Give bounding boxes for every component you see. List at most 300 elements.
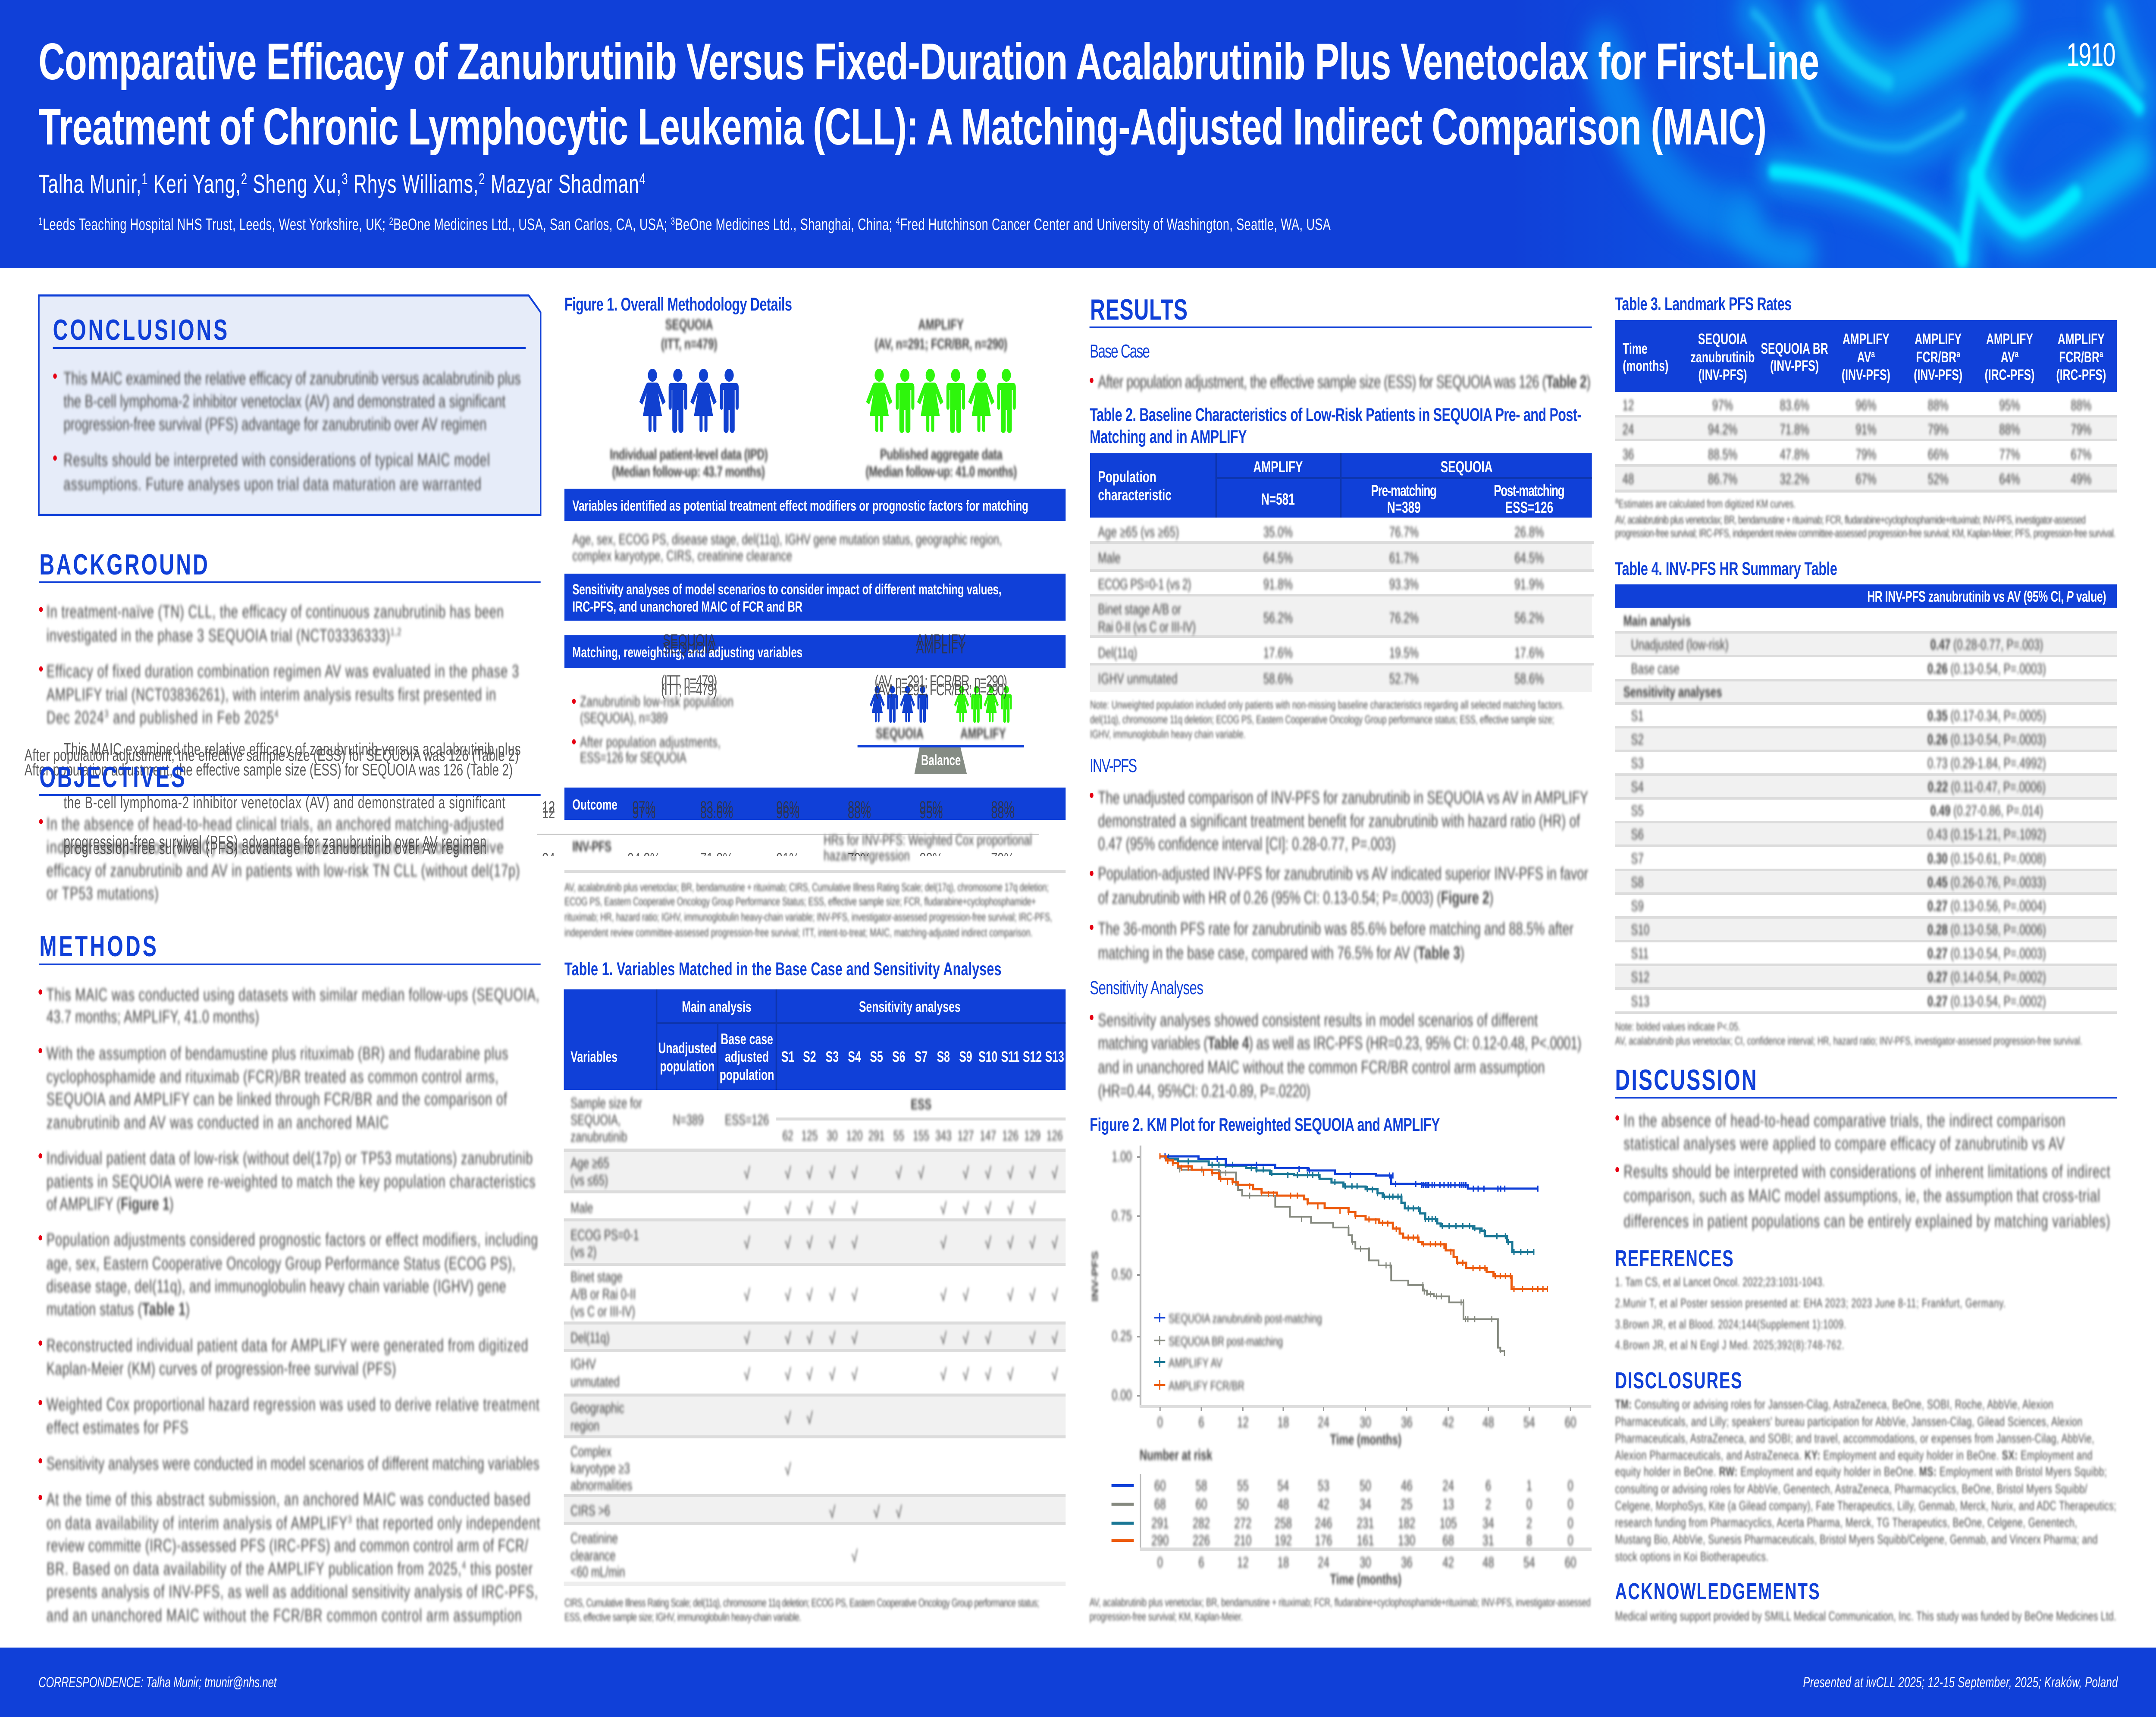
- disclosures text: stock options in Koi Biotherapeutics.: [1615, 1549, 1768, 1564]
- table 1 header: S6: [892, 1049, 906, 1065]
- overlapping stray study labels and table row: 79%: [991, 849, 1014, 868]
- table 2 body: Binet stage A/B or: [1098, 601, 1181, 618]
- overlapping stray study labels and table row: 88%: [991, 803, 1014, 822]
- overlapping stray study labels and table row: (AV, n=291; FCR/BR, n=290): [874, 680, 1007, 699]
- number at risk table: 0: [1526, 1496, 1532, 1513]
- table 3 header: AV: [1857, 349, 1871, 366]
- table 4 row labels: S8: [1631, 874, 1644, 891]
- table 3 header: SEQUOIA: [1698, 331, 1747, 348]
- x axis labels: 30: [1360, 1414, 1371, 1431]
- number at risk table: 0: [1567, 1478, 1573, 1494]
- matching bullets: After population adjustments,: [580, 734, 721, 750]
- overlapping stray text lines: After population adjustment, the effective sample size (ESS) for SEQUOIA was 126 (Table 2): [25, 760, 513, 779]
- chart legend: SEQUOIA zanubrutinib post-matching: [1169, 1311, 1322, 1326]
- table 1 header: S11: [1001, 1049, 1020, 1065]
- overlapping stray study labels and table row: 24: [542, 849, 555, 868]
- number at risk table: 42: [1442, 1554, 1454, 1571]
- authors: 2: [479, 170, 485, 188]
- matching variables text: Age, sex, ECOG PS, disease stage, del(11q), IGHV gene mutation status, geographic region,: [572, 531, 1002, 548]
- number at risk table: 54: [1523, 1554, 1535, 1571]
- number at risk table: 42: [1318, 1496, 1329, 1513]
- table 2 body: 91.9%: [1514, 576, 1544, 593]
- table 1 sample sizes: 147: [980, 1128, 996, 1143]
- x axis labels: 12: [1237, 1414, 1249, 1431]
- chart legend: SEQUOIA BR post-matching: [1169, 1334, 1283, 1349]
- overlapping stray study labels and table row: AMPLIFY: [916, 631, 966, 649]
- number at risk table: 231: [1357, 1515, 1374, 1532]
- reference list: 3.Brown JR, et al Blood. 2024;144(Supplement 1):1009.: [1615, 1318, 1846, 1331]
- objectives text: In the absence of head-to-head clinical trials, an anchored matching-adjusted: [47, 814, 504, 834]
- sensitivity text: (HR=0.44, 95%CI: 0.21-0.89, P=.0220): [1098, 1081, 1310, 1101]
- banner: sensitivity analyses: Sensitivity analyses of model scenarios to consider impact of different matching values,: [572, 581, 1001, 598]
- reference list: [1615, 1275, 2006, 1352]
- table 1 row labels: region: [570, 1418, 599, 1434]
- methods text: patients in SEQUOIA were re-weighted to match the key population characteristics: [47, 1171, 536, 1191]
- methods text: Population adjustments considered prognostic factors or effect modifiers, including: [47, 1230, 538, 1249]
- matching variables text: [572, 531, 1002, 564]
- number at risk table: 0: [1157, 1554, 1163, 1571]
- table 4 row labels: S1: [1631, 708, 1644, 724]
- table 2 footnote: IGHV, immunoglobulin heavy chain variable.: [1090, 728, 1246, 741]
- heading: methods: METHODS: [39, 930, 157, 963]
- table 2 body: 26.8%: [1514, 524, 1544, 540]
- x axis labels: 48: [1482, 1414, 1494, 1431]
- chart legend: [1154, 1311, 1322, 1393]
- table 4 row labels: Sensitivity analyses: [1623, 684, 1722, 700]
- number at risk table: 50: [1237, 1496, 1249, 1513]
- table 1 check marks: √: [851, 1547, 858, 1565]
- table 1 header: Base case: [721, 1031, 773, 1048]
- table 3 body: 79%: [2071, 421, 2091, 438]
- number at risk table: 25: [1401, 1496, 1413, 1513]
- figure 1 footnote: [564, 881, 1052, 939]
- table 3 footnote: progression-free survival; IRC-PFS, independent review committee-assessed progression-free survival; KM, Kaplan-Meier; PFS, progression-free survival.: [1615, 527, 2115, 540]
- table 3 body: 49%: [2071, 471, 2091, 487]
- disclosures text: [1615, 1397, 2116, 1564]
- methods text: SEQUOIA and AMPLIFY can be linked through FCR/BR and the comparison of: [47, 1089, 507, 1109]
- figure 2 footnote: [1090, 1596, 1591, 1623]
- figure 2 footnote: progression-free survival; KM, Kaplan-Meier.: [1090, 1610, 1243, 1623]
- panel: methods: [38, 930, 541, 1625]
- heading: results: RESULTS: [1090, 294, 1188, 326]
- panel: figure 1 methodology: [537, 294, 1065, 939]
- number at risk table: 18: [1278, 1554, 1289, 1571]
- x axis labels: [1157, 1414, 1576, 1448]
- acknowledgements text: Medical writing support provided by SMILL Medical Communication, Inc. This study was funded by BeOne Medicines Ltd.: [1615, 1608, 2116, 1623]
- table 1 sample sizes: 30: [827, 1128, 837, 1143]
- disclosures text: Pharmaceuticals, and Lilly; speakers' bureau participation for AbbVie, Janssen-Cilag, Gilead Sciences, Alexion: [1615, 1414, 2082, 1429]
- background text: In treatment-naïve (TN) CLL, the efficacy of continuous zanubrutinib has been: [47, 602, 504, 622]
- methods text: Individual patient data of low-risk (without del(17p) or TP53 mutations) zanubrutinib: [47, 1148, 533, 1168]
- table 3 body: 96%: [1855, 397, 1877, 414]
- table 4 row labels: S2: [1631, 731, 1644, 748]
- heading: discussion: DISCUSSION: [1615, 1064, 1757, 1096]
- icon: balance scale: AMPLIFY: [960, 725, 1006, 742]
- overlapping stray text lines: the B-cell lymphoma-2 inhibitor venetoclax (AV) and demonstrated a significant: [63, 793, 506, 812]
- x axis labels: 18: [1278, 1414, 1289, 1431]
- heading: objectives: OBJECTIVES: [39, 761, 185, 794]
- methods text: Weighted Cox proportional hazard regression was used to derive relative treatment: [47, 1394, 539, 1414]
- methods text: presents analysis of INV-PFS, as well as additional sensitivity analysis of IRC-PFS,: [47, 1582, 538, 1601]
- table 4 row labels: S10: [1631, 922, 1649, 938]
- number at risk table: 58: [1196, 1478, 1207, 1494]
- study column labels: (AV, n=291; FCR/BR, n=290): [874, 336, 1007, 352]
- number at risk table: Number at risk: [1140, 1447, 1213, 1463]
- overlapping stray study labels and table row: 88%: [848, 797, 871, 816]
- table 1 check marks: √√√√√√√√√√: [744, 1286, 1058, 1304]
- table 4 header: HR INV-PFS zanubrutinib vs AV (95% CI, P value): [1867, 589, 2106, 605]
- table 1 row labels: [570, 1095, 642, 1580]
- table 1 row labels: A/B or Rai 0-II: [570, 1286, 636, 1303]
- banner: sensitivity analyses: [564, 574, 1065, 621]
- table 2 body: Male: [1098, 550, 1121, 566]
- conclusions text: assumptions. Future analyses upon trial data maturation are warranted: [63, 474, 481, 494]
- number at risk table: 8: [1526, 1532, 1532, 1549]
- curve: SEQUOIA BR: [1160, 1156, 1504, 1356]
- table 4 hazard ratios: 0.30 (0.15-0.61, P=.0008): [1927, 851, 2046, 867]
- overlapping stray text lines: [25, 740, 521, 858]
- y axis labels: 0.00: [1112, 1387, 1132, 1403]
- table 1 sample sizes: [673, 1096, 1063, 1143]
- table 4 title: Table 4. INV-PFS HR Summary Table: [1615, 558, 1837, 579]
- table 2 title: [1090, 404, 1582, 447]
- table 1 row labels: Geographic: [570, 1400, 624, 1416]
- disclosures text: consulting or advising roles for AbbVie, Genentech, AstraZeneca, Pharmacyclics, BeOne, Bristol Myers Squibb/: [1615, 1481, 2087, 1496]
- table 1 sample sizes: 291: [868, 1128, 885, 1143]
- INV-PFS text: The unadjusted comparison of INV-PFS for zanubrutinib in SEQUOIA vs AV in AMPLIFY: [1098, 788, 1588, 807]
- background text: 3: [104, 708, 109, 720]
- methods text: age, sex, Eastern Cooperative Oncology Group Performance Status (ECOG PS),: [47, 1253, 516, 1273]
- table 2 body: Age ≥65 (vs ≥65): [1098, 524, 1179, 540]
- discussion text: statistical analyses were applied to compare efficacy of zanubrutinib vs AV: [1623, 1133, 2065, 1153]
- decorative swirl background: [1604, 13, 2139, 259]
- study column labels: AMPLIFY: [918, 317, 964, 333]
- panel: conclusions: [39, 295, 541, 515]
- table 3 header: SEQUOIA BR: [1761, 341, 1828, 357]
- table 2 header: Population: [1098, 468, 1156, 486]
- table 3 body: 67%: [1855, 471, 1877, 487]
- disclosures text: TM: Consulting or advising roles for Janssen-Cilag, AstraZeneca, BeOne, SOBI, Roche, AbbVie, Alexion: [1615, 1397, 2053, 1412]
- table 3 body: 83.6%: [1780, 397, 1809, 414]
- table 3 header: FCR/BR: [1916, 349, 1956, 366]
- authors: Rhys Williams,: [348, 170, 478, 199]
- title: Treatment of Chronic Lymphocytic Leukemia (CLL): A Matching-Adjusted Indirect Comparison (MAIC): [38, 98, 1767, 156]
- table 2 header: [1090, 453, 1592, 518]
- methods text: mutation status (Table 1): [47, 1299, 190, 1319]
- table 1 header: adjusted: [725, 1049, 769, 1065]
- affiliations: BeOne Medicines Ltd., Shanghai, China;: [675, 215, 896, 233]
- figure 2 footnote: AV, acalabrutinib plus venetoclax; BR, bendamustine + rituximab; FCR, fludarabine+cyclophosphamide+rituximab; INV-PFS, investigator-assessed: [1090, 1596, 1591, 1609]
- table 1 header: S4: [848, 1049, 861, 1065]
- table 3 footnote: a: [1615, 496, 1619, 505]
- table 1 check marks: √√√√√√√√√√: [744, 1234, 1058, 1252]
- overlapping stray text lines: progression-free survival (PFS) advantage for zanubrutinib over AV regimen: [63, 839, 486, 858]
- table 2 body: 58.6%: [1514, 671, 1544, 687]
- number at risk table: 31: [1482, 1532, 1494, 1549]
- data source captions: (Median follow-up: 43.7 months): [612, 464, 765, 480]
- disclosures text: equity holder in BeOne. RW: Employment and equity holder in BeOne. MS: Employment with Bristol Myers Squibb;: [1615, 1464, 2107, 1479]
- number at risk table: 282: [1193, 1515, 1210, 1532]
- y axis labels: 0.50: [1112, 1266, 1132, 1283]
- number at risk table: 182: [1398, 1515, 1415, 1532]
- y axis labels: 0.25: [1112, 1328, 1132, 1344]
- table 3 header: AMPLIFY: [2058, 331, 2105, 348]
- outcome row: hazard regression: [824, 848, 910, 864]
- table 3 body: 77%: [1999, 446, 2020, 463]
- table 1 row labels: Sample size for: [570, 1095, 642, 1111]
- authors: 1: [141, 170, 148, 188]
- table 4 footnote: [1615, 1020, 2082, 1047]
- outcome row: INV-PFS: [572, 838, 611, 855]
- overlapping stray study labels and table row: 95%: [920, 803, 943, 822]
- overlapping stray study labels and table row: 12: [542, 803, 555, 822]
- conclusions text: Results should be interpreted with considerations of typical MAIC model: [63, 450, 490, 470]
- banner: variables identified: Variables identified as potential treatment effect modifiers or prognostic factors for matching: [572, 498, 1028, 514]
- x axis labels: 60: [1565, 1414, 1576, 1431]
- background text: [47, 602, 519, 727]
- data source captions: Individual patient-level data (IPD): [610, 446, 768, 463]
- table 1 row labels: (vs ≤65): [570, 1172, 608, 1189]
- table 2 body: 56.2%: [1514, 610, 1544, 626]
- subheading: INV-PFS: INV-PFS: [1090, 755, 1137, 776]
- overlapping stray study labels and table row: 96%: [776, 797, 799, 816]
- figure 1 footnote: ECOG PS, Eastern Cooperative Oncology Group Performance Status; ESS, effective sample size; FCR, fludarabine+cyclophosphamide+: [564, 895, 1036, 908]
- panel: discussion: [1615, 1064, 2117, 1231]
- panel: table 4: [1615, 558, 2117, 1047]
- table 3 body: 86.7%: [1708, 471, 1737, 487]
- table 2 footnote: del(11q), chromosome 11q deletion; ECOG PS, Eastern Cooperative Oncology Group performance status; ESS, effective sample size;: [1090, 713, 1554, 726]
- overlapping stray study labels and table row: SEQUOIA: [663, 638, 716, 657]
- table 2 header: Post-matching: [1494, 482, 1565, 499]
- disclosures text: Celgene, MorphoSys, Kite (a Gilead company), Fate Therapeutics, Lilly, Genmab, Merck, Nurix, and ADC Therapeutics;: [1615, 1498, 2116, 1513]
- methods text: [47, 985, 540, 1625]
- table 1 header: [564, 989, 1065, 1090]
- table 1 header: S3: [826, 1049, 839, 1065]
- sensitivity text: and in unanchored MAIC without the common FCR/BR control arm assumption: [1098, 1057, 1545, 1077]
- table 3 header: (IRC-PFS): [1985, 367, 2034, 383]
- table 4 footnote: Note: bolded values indicate P<.05.: [1615, 1020, 1740, 1033]
- table 1 row labels: Complex: [570, 1444, 611, 1460]
- banner: sensitivity analyses: IRC-PFS, and unanchored MAIC of FCR and BR: [572, 599, 802, 615]
- methods text: cyclophosphamide and rituximab (FCR)/BR treated as common control arms,: [47, 1067, 498, 1086]
- table 3 header: (IRC-PFS): [2056, 367, 2106, 383]
- objectives text: [47, 814, 520, 903]
- table 4 hazard ratios: 0.27 (0.13-0.54, P=.0002): [1927, 993, 2046, 1010]
- discussion text: differences in patient populations can be entirely explained by matching variables): [1623, 1211, 2110, 1231]
- number at risk table: 192: [1275, 1532, 1292, 1549]
- table 4 hazard ratios: 0.27 (0.13-0.54, P=.0003): [1927, 945, 2046, 962]
- overlapping stray study labels and table row: 71.8%: [700, 849, 733, 868]
- table 4 hazard ratios: 0.22 (0.11-0.47, P=.0006): [1928, 779, 2046, 795]
- table 2 body: 61.7%: [1389, 550, 1419, 566]
- table 1 header: Unadjusted: [658, 1040, 716, 1057]
- table 1 sample sizes: 129: [1024, 1128, 1040, 1143]
- table 2 body: 76.7%: [1389, 524, 1419, 540]
- number at risk table: 34: [1360, 1496, 1371, 1513]
- overlapping stray study labels and table row: 88%: [920, 849, 943, 868]
- curve: AMPLIFY FCR/BR: [1160, 1153, 1548, 1292]
- y axis title: INV-PFS: [1090, 1251, 1100, 1301]
- heading: acknowledgements: ACKNOWLEDGEMENTS: [1615, 1579, 1820, 1604]
- authors: Talha Munir,: [38, 170, 141, 199]
- overlapping stray study labels and table row: 91%: [776, 849, 799, 868]
- affiliations: BeOne Medicines Ltd., USA, San Carlos, CA, USA;: [393, 215, 671, 233]
- table 1 body: [564, 1095, 1065, 1586]
- table 2 header: AMPLIFY: [1253, 458, 1303, 476]
- methods text: 4: [462, 1560, 466, 1571]
- figure 2 title: Figure 2. KM Plot for Reweighted SEQUOIA and AMPLIFY: [1090, 1114, 1440, 1135]
- table 3 footnote: AV, acalabrutinib plus venetoclax; BR, bendamustine + rituximab; FCR, fludarabine+cyclophosphamide+rituximab; INV-PFS, investigator-assessed: [1615, 514, 2086, 526]
- table 1 header: population: [660, 1058, 714, 1075]
- study column labels: SEQUOIA: [665, 317, 713, 333]
- number at risk table: 272: [1234, 1515, 1251, 1532]
- number at risk table: 2: [1526, 1515, 1532, 1532]
- number at risk table: 48: [1278, 1496, 1289, 1513]
- icon: AMPLIFY patients: [866, 369, 1016, 433]
- panel: acknowledgements: [1615, 1579, 2116, 1623]
- objectives text: indirect comparison (MAIC) was conducted to investigate the comparative: [47, 837, 504, 857]
- table 1 sample sizes: N=389: [673, 1112, 704, 1128]
- objectives text: or TP53 mutations): [47, 883, 159, 903]
- table 3 body: 48: [1623, 471, 1634, 487]
- table 3 body: 36: [1623, 446, 1634, 463]
- background text: 4: [274, 708, 279, 720]
- overlapping stray study labels and table row: 96%: [776, 803, 799, 822]
- methods text: Reconstructed individual patient data for AMPLIFY were generated from digitized: [47, 1335, 528, 1355]
- table 1 sample sizes: 55: [893, 1128, 904, 1143]
- overlapping stray study labels and table row: (ITT, n=479): [661, 680, 717, 699]
- table 1 row labels: Male: [570, 1200, 593, 1216]
- affiliations: 2: [389, 216, 393, 227]
- table 1 title: Table 1. Variables Matched in the Base Case and Sensitivity Analyses: [564, 958, 1001, 979]
- number at risk table: 210: [1234, 1532, 1251, 1549]
- heading: conclusions: CONCLUSIONS: [53, 314, 227, 346]
- table 1 header: S9: [959, 1049, 972, 1065]
- table 3 body: 79%: [1855, 446, 1877, 463]
- methods text: this poster: [466, 1559, 533, 1579]
- table 4 hazard ratios: 0.73 (0.29-1.84, P=.4992): [1927, 755, 2046, 772]
- table 4 row labels: Unadjusted (low-risk): [1631, 637, 1729, 653]
- chart legend: AMPLIFY FCR/BR: [1169, 1378, 1244, 1393]
- table 3 body: [1615, 397, 2117, 493]
- table 1 row labels: karyotype ≥3: [570, 1460, 630, 1477]
- data source captions: Published aggregate data: [880, 446, 1003, 463]
- table 2 body: 64.5%: [1263, 550, 1293, 566]
- table 1 check marks: √√√√√√√√√√√√: [744, 1164, 1058, 1182]
- overlapping stray study labels and table row: 95%: [920, 797, 943, 816]
- table 1 row labels: IGHV: [570, 1356, 596, 1372]
- methods text: 43.7 months; AMPLIFY, 41.0 months): [47, 1007, 259, 1026]
- table 4 hazard ratios: 0.49 (0.27-0.86, P=.014): [1930, 803, 2043, 819]
- table 1 sample sizes: 126: [1002, 1128, 1018, 1143]
- icon: SEQUOIA patients: [639, 369, 739, 433]
- number at risk table: 0: [1567, 1515, 1573, 1532]
- INV-PFS text: matching in the base case, compared with 76.5% for AV (Table 3): [1098, 943, 1464, 963]
- background text: Dec 2024: [47, 707, 104, 727]
- panel: background: [39, 549, 541, 727]
- icon: balance scale: Balance: [921, 752, 961, 769]
- table 2 body: 56.2%: [1263, 610, 1293, 626]
- table 2 header: Pre-matching: [1371, 482, 1437, 499]
- header banner: [0, 0, 2156, 268]
- table 3 body: 64%: [1999, 471, 2020, 487]
- x axis labels: 36: [1401, 1414, 1413, 1431]
- x axis labels: 24: [1318, 1414, 1329, 1431]
- table 4 header: [1615, 584, 2117, 608]
- number at risk table: 161: [1357, 1532, 1374, 1549]
- number at risk table: 258: [1275, 1515, 1292, 1532]
- title: [38, 33, 1819, 156]
- title: Comparative Efficacy of Zanubrutinib Versus Fixed-Duration Acalabrutinib Plus Venetoclax for First-Line: [38, 33, 1819, 91]
- table 4 footnote: AV, acalabrutinib plus venetoclax; CI, confidence interval; HR, hazard ratio; INV-PFS, investigator-assessed progression-free survival.: [1615, 1035, 2082, 1047]
- table 1 header: S8: [937, 1049, 950, 1065]
- methods text: review committe (IRC)-assessed PFS (IRC-PFS) and common control arm of FCR/: [47, 1535, 528, 1555]
- table 3 body: 91%: [1855, 421, 1877, 438]
- overlapping stray study labels and table row: 88%: [848, 803, 871, 822]
- table 1 sample sizes: ESS=126: [725, 1112, 769, 1128]
- table 1 sample sizes: 126: [1047, 1128, 1063, 1143]
- table 1 check marks: √√√√√√√√√√: [744, 1199, 1036, 1218]
- overlapping stray study labels and table row: (AV, n=291; FCR/BR, n=290): [874, 672, 1007, 690]
- outcome row: HRs for INV-PFS: Weighted Cox proportional: [824, 832, 1032, 848]
- table 2 body: Rai 0-II (vs C or III-IV): [1098, 619, 1196, 635]
- overlapping stray text lines: After population adjustment, the effective sample size (ESS) for SEQUOIA was 126 (Table 2): [25, 746, 519, 765]
- table 2 header: N=581: [1261, 490, 1295, 508]
- methods text: of AMPLIFY (Figure 1): [47, 1194, 174, 1214]
- table 4 row labels: Base case: [1631, 661, 1680, 677]
- number at risk table: 55: [1237, 1478, 1249, 1494]
- reference list: 2.Munir T, et al Poster session presented at: EHA 2023; 2023 June 8-11; Frankfurt, Germany.: [1615, 1296, 2006, 1310]
- table 2 body: ECOG PS=0-1 (vs 2): [1098, 576, 1191, 593]
- table 3 body: 66%: [1928, 446, 1949, 463]
- table 3 body: 88%: [2071, 397, 2091, 414]
- discussion text: [1623, 1111, 2110, 1231]
- table 1 sample sizes: 127: [958, 1128, 974, 1143]
- table 3 header: a: [2100, 349, 2103, 360]
- conclusions text: the B-cell lymphoma-2 inhibitor venetoclax (AV) and demonstrated a significant: [63, 391, 505, 411]
- authors: 2: [241, 170, 247, 188]
- methods text: effect estimates for PFS: [47, 1417, 188, 1437]
- methods text: BR. Based on data availability of the AMPLIFY publication from 2025,: [47, 1559, 461, 1579]
- number at risk table: Time (months): [1330, 1571, 1401, 1588]
- table 2 header: N=389: [1387, 499, 1421, 516]
- authors: Mazyar Shadman: [485, 170, 639, 199]
- methods text: zanubrutinib and AV was conducted in an anchored MAIC: [47, 1112, 389, 1132]
- number at risk table: 0: [1567, 1496, 1573, 1513]
- number at risk table: 54: [1278, 1478, 1289, 1494]
- affiliations: Leeds Teaching Hospital NHS Trust, Leeds, West Yorkshire, UK;: [43, 215, 389, 233]
- table 3 body: 47.8%: [1780, 446, 1809, 463]
- methods text: that reported only independent: [352, 1513, 540, 1533]
- table 4 hazard ratios: 0.43 (0.15-1.21, P=.1092): [1927, 826, 2046, 843]
- affiliations: 3: [671, 216, 675, 227]
- matching bullets: (SEQUOIA), n=389: [580, 710, 668, 726]
- INV-PFS text: Population-adjusted INV-PFS for zanubrutinib vs AV indicated superior INV-PFS in favor: [1098, 863, 1588, 883]
- table 4 row labels: S11: [1631, 945, 1649, 962]
- chart legend: AMPLIFY AV: [1169, 1355, 1222, 1370]
- table 3 header: AMPLIFY: [1843, 331, 1890, 348]
- banner: matching: Matching, reweighting, and adjusting variables: [572, 644, 802, 661]
- table 1 check marks: √√√√√√√√√√: [744, 1329, 1058, 1347]
- table 1 row labels: clearance: [570, 1547, 616, 1564]
- background text: investigated in the phase 3 SEQUOIA trial (NCT03336333): [47, 625, 390, 645]
- table 4 body: [1615, 613, 2117, 1013]
- table 3 body: 79%: [1928, 421, 1949, 438]
- number at risk table: 46: [1401, 1478, 1413, 1494]
- panel: disclosures: [1615, 1368, 2116, 1564]
- banner: matching: [564, 635, 1065, 668]
- number at risk table: 0: [1567, 1532, 1573, 1549]
